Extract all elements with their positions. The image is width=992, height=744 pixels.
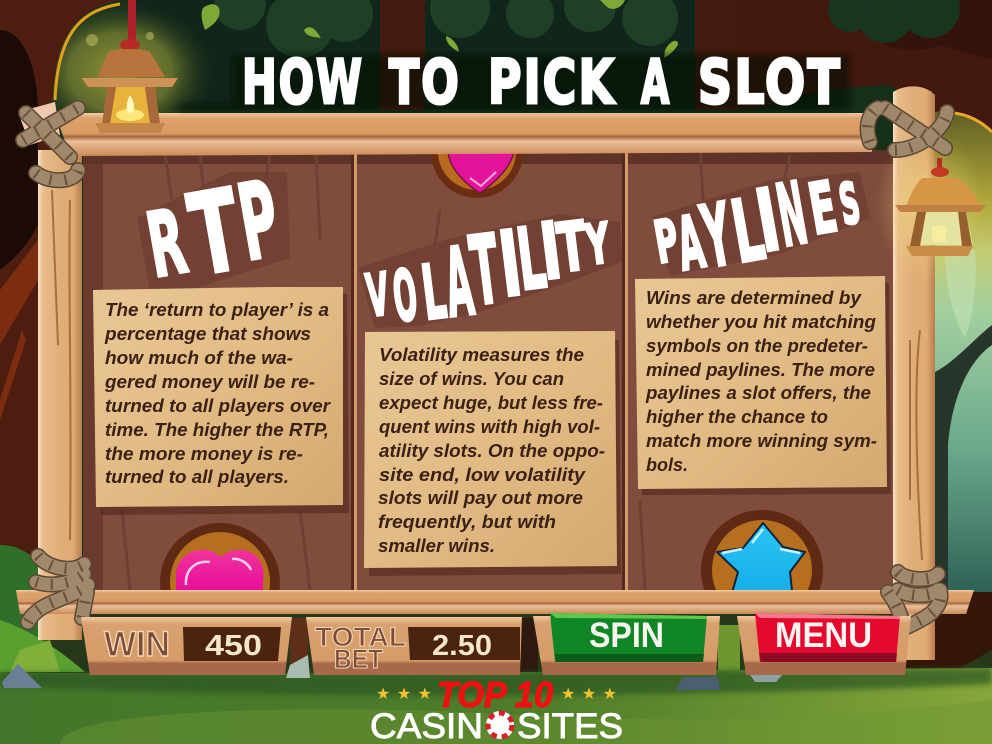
rope knot: top right bbox=[868, 108, 947, 150]
right post bbox=[893, 86, 935, 660]
gem: blue star bbox=[701, 510, 823, 590]
heading: Volatility: A bbox=[439, 226, 479, 339]
title: TO bbox=[389, 47, 461, 118]
Paylines body text: paylines a slot offers, the bbox=[645, 383, 871, 403]
Volatility body text: smaller wins. bbox=[378, 536, 495, 556]
canopy foliage bbox=[130, 0, 830, 110]
title: PICK bbox=[488, 47, 616, 118]
win value box bbox=[183, 627, 281, 661]
board back panel bbox=[83, 150, 893, 590]
parchment bbox=[640, 283, 891, 495]
rope knot: bottom left bbox=[28, 556, 88, 622]
plate: menu bbox=[737, 613, 911, 675]
RTP body text bbox=[104, 300, 331, 487]
heading: Volatility bbox=[358, 205, 622, 339]
left tree trunk bbox=[0, 0, 120, 580]
RTP body text: turned to all players. bbox=[105, 467, 289, 487]
column: Paylines bbox=[635, 165, 891, 495]
title: SLOT bbox=[698, 47, 842, 118]
plate: spin bbox=[533, 613, 720, 675]
gem: bottom heart bbox=[160, 523, 280, 590]
heading: RTP bbox=[137, 160, 290, 301]
Paylines body text: symbols on the predeter- bbox=[646, 336, 868, 356]
column: RTP bbox=[93, 160, 349, 515]
plate: total bet bbox=[306, 617, 522, 675]
heading: Volatility: I bbox=[535, 205, 566, 298]
heading: RTP: R bbox=[140, 190, 194, 298]
win value: 450 bbox=[205, 630, 262, 662]
dark undergrowth band bbox=[0, 592, 992, 680]
heading: Paylines bbox=[650, 165, 870, 288]
grass bbox=[0, 668, 992, 744]
logo: top 10 casino sites bbox=[370, 674, 623, 744]
Paylines body text: Wins are determined by bbox=[646, 288, 862, 308]
spin button bbox=[550, 613, 707, 662]
spin label: SPIN bbox=[589, 616, 664, 655]
total bet label: TOTAL bbox=[315, 622, 406, 652]
total bet value: 2.50 bbox=[432, 630, 492, 662]
rocks bbox=[2, 655, 785, 690]
left leaves bbox=[0, 545, 85, 672]
grass highlight bbox=[60, 700, 992, 744]
gem: top heart bbox=[431, 154, 523, 198]
lantern rope bbox=[128, 0, 136, 42]
RTP body text: percentage that shows bbox=[104, 324, 311, 344]
waterfall and branch bbox=[935, 250, 992, 590]
RTP body text: time. The higher the RTP, bbox=[105, 420, 329, 440]
falling leaves bbox=[202, 0, 678, 58]
heading: Paylines: I bbox=[749, 171, 787, 273]
Volatility body text: atility slots. On the oppo- bbox=[379, 441, 605, 461]
heading: Volatility: L bbox=[512, 209, 551, 310]
Volatility body text: expect huge, but less fre- bbox=[379, 393, 603, 413]
Volatility body text: slots will pay out more bbox=[378, 488, 583, 508]
menu button bbox=[755, 613, 900, 662]
left stars: ★★★ bbox=[376, 686, 432, 703]
heading: Volatility: Y bbox=[582, 211, 613, 278]
RTP body text: how much of the wa- bbox=[105, 348, 293, 368]
left post bbox=[38, 150, 82, 640]
parchment bbox=[369, 340, 621, 576]
title bbox=[178, 47, 850, 118]
left lantern bbox=[82, 0, 178, 133]
heading: Volatility: T bbox=[465, 215, 506, 328]
heading: Volatility: I bbox=[494, 211, 527, 318]
plate: win bbox=[81, 617, 292, 675]
Paylines body text bbox=[645, 288, 877, 475]
RTP body text: the more money is re- bbox=[105, 444, 303, 464]
heading: Volatility: L bbox=[417, 247, 451, 337]
post grain bbox=[52, 190, 922, 560]
left lantern glow bbox=[25, 0, 215, 144]
title shadow bbox=[178, 54, 850, 110]
column dividers bbox=[351, 150, 628, 590]
heading: RTP: T bbox=[181, 165, 250, 301]
right lantern bbox=[895, 158, 986, 256]
heading: Paylines: A bbox=[671, 201, 711, 288]
Paylines body text: whether you hit matching bbox=[646, 312, 876, 332]
heading: RTP: P bbox=[230, 160, 288, 285]
total bet value box bbox=[408, 627, 520, 660]
heading: Paylines: S bbox=[835, 171, 865, 239]
parchment bbox=[99, 294, 349, 515]
heading: Paylines: E bbox=[803, 167, 843, 251]
Volatility body text bbox=[378, 345, 605, 556]
Volatility body text: site end, low volatility bbox=[379, 465, 586, 485]
heading: Paylines: N bbox=[770, 165, 814, 267]
title: HOW bbox=[242, 47, 364, 118]
menu label: MENU bbox=[775, 616, 872, 655]
rope knot: bottom right bbox=[888, 572, 941, 628]
win label: WIN bbox=[104, 625, 170, 664]
total bet label bbox=[315, 622, 406, 674]
top beam bbox=[55, 113, 872, 156]
heading: Paylines: Y bbox=[695, 185, 739, 288]
heading: Volatility: O bbox=[389, 255, 422, 338]
Paylines body text: mined paylines. The more bbox=[646, 360, 875, 380]
right stars: ★★★ bbox=[561, 686, 617, 703]
Volatility body text: frequently, but with bbox=[378, 512, 556, 532]
Volatility body text: quent wins with high vol- bbox=[379, 417, 600, 437]
RTP body text: The ‘return to player’ is a bbox=[105, 300, 329, 320]
bottom beam bbox=[16, 590, 974, 614]
grass shade bbox=[0, 668, 992, 696]
Paylines body text: bols. bbox=[646, 455, 688, 475]
RTP body text: gered money will be re- bbox=[104, 372, 315, 392]
heading: Paylines: P bbox=[650, 206, 683, 276]
column: Volatility bbox=[358, 205, 622, 576]
wooden board frame bbox=[38, 86, 985, 660]
Paylines body text: match more winning sym- bbox=[646, 431, 877, 451]
heading: Paylines: L bbox=[725, 180, 771, 283]
heading: Volatility: V bbox=[363, 261, 392, 330]
chip icon bbox=[486, 711, 514, 739]
right tree and branch bbox=[735, 0, 992, 595]
rope knot: top left bbox=[18, 102, 78, 180]
RTP body text: turned to all players over bbox=[105, 396, 331, 416]
heading: Volatility: T bbox=[553, 207, 591, 288]
Volatility body text: Volatility measures the bbox=[379, 345, 584, 365]
top 10 wordmark: TOP 10 bbox=[437, 674, 553, 715]
title: A bbox=[641, 47, 671, 118]
total bet label: BET bbox=[334, 644, 383, 674]
Paylines body text: higher the chance to bbox=[646, 407, 828, 427]
post lantern glow bbox=[875, 130, 985, 280]
Volatility body text: size of wins. You can bbox=[379, 369, 564, 389]
